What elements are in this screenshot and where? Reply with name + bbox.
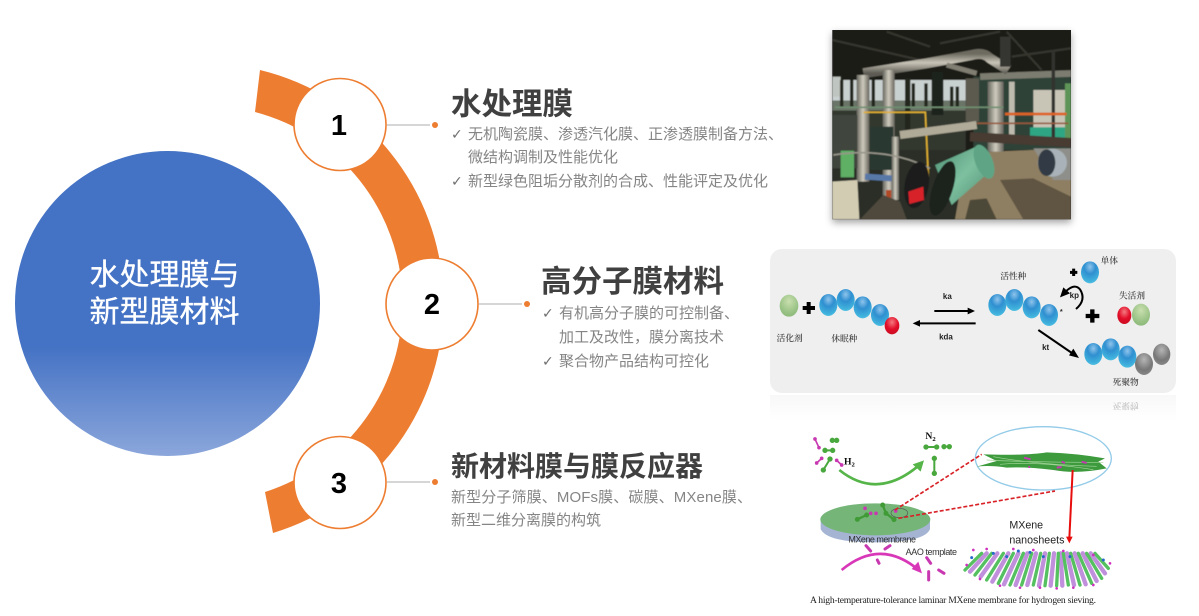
red arrow to nanosheets [1066, 470, 1073, 543]
activator ball [780, 295, 798, 317]
panel: polymerization reaction diagram: * [1060, 307, 1063, 316]
plus sign [1086, 309, 1099, 323]
kp curved arrow [1060, 287, 1083, 309]
text block 1: water treatment membranes: 微结构调制及性能优化 [468, 149, 618, 166]
active chain [988, 289, 1058, 326]
reflected label: 死聚物 [1113, 401, 1139, 412]
panel: polymerization reaction diagram: ka [943, 292, 952, 301]
membrane disk [820, 503, 930, 542]
text block 3: new material membranes: 新型分子筛膜、MOFs膜、碳膜、MXene膜、 [451, 489, 752, 506]
text block 2: polymer membrane materials: 加工及改性，膜分离技术 [559, 329, 724, 346]
diagram: MXene membrane for hydrogen sieving: nanosheets [1009, 534, 1064, 546]
panel: polymerization reaction diagram: 活性种 [1000, 270, 1027, 281]
diagram: MXene membrane for hydrogen sieving: AAO template [906, 547, 957, 557]
node 2 [386, 258, 530, 350]
photo: membrane plant equipment [832, 30, 1071, 219]
text block 1: water treatment membranes: ✓ [451, 174, 463, 190]
text block 1: water treatment membranes: 新型绿色阻垢分散剂的合成、性能评定及优化 [468, 173, 768, 190]
panel: polymerization reaction diagram: 失活剂 [1119, 289, 1145, 300]
magnified ellipse with MXene layers [975, 427, 1111, 490]
dormant chain [819, 289, 899, 334]
text block 1: water treatment membranes: 水处理膜 [451, 88, 573, 122]
text block 3: new material membranes: 新型二维分离膜的构筑 [451, 512, 601, 529]
text block 1: water treatment membranes: ✓ [451, 127, 463, 143]
figure caption: A high-temperature-tolerance laminar MXene membrane for hydrogen sieving. [810, 595, 1096, 606]
text block 2: polymer membrane materials: ✓ [542, 306, 554, 322]
green flow arrow [839, 460, 924, 484]
central circle: main topic [15, 151, 320, 456]
panel: polymerization reaction diagram [770, 249, 1176, 421]
text block 3: new material membranes [451, 451, 752, 529]
diagram: MXene membrane for hydrogen sieving: MXene membrane [848, 534, 916, 544]
text block 1: water treatment membranes: 无机陶瓷膜、渗透汽化膜、正渗透膜制备方法、 [468, 126, 783, 143]
central circle: main topic: 水处理膜与 [90, 259, 240, 292]
kt arrow [1038, 330, 1079, 358]
panel: polymerization reaction diagram: 死聚物 [1113, 376, 1139, 387]
node 1 [294, 78, 438, 170]
diagram: MXene membrane for hydrogen sieving: 2 [932, 436, 936, 443]
feed gas molecules [815, 439, 949, 473]
text block 2: polymer membrane materials: ✓ [542, 354, 554, 370]
dead chain [1084, 338, 1170, 375]
text block 2: polymer membrane materials: 有机高分子膜的可控制备、 [559, 305, 739, 322]
node 1: 1 [331, 110, 347, 142]
monomer [1070, 269, 1077, 276]
panel: polymerization reaction diagram: 单体 [1101, 254, 1118, 265]
diagram: MXene membrane for hydrogen sieving: MXene [1009, 520, 1043, 532]
diagram: MXene membrane for hydrogen sieving: 2 [852, 462, 856, 469]
text block 1: water treatment membranes [451, 88, 783, 190]
plus sign [803, 302, 815, 314]
node 3: 3 [331, 468, 347, 500]
text block 2: polymer membrane materials [541, 265, 739, 370]
text block 2: polymer membrane materials: 聚合物产品结构可控化 [559, 353, 709, 370]
permeate magenta arrow [842, 546, 944, 580]
panel: polymerization reaction diagram: kt [1042, 343, 1050, 352]
panel: polymerization reaction diagram: 活化剂 [777, 332, 803, 343]
diagram: MXene membrane for hydrogen sieving: N [925, 431, 932, 442]
text block 3: new material membranes: 新材料膜与膜反应器 [451, 451, 703, 482]
panel: polymerization reaction diagram: kda [939, 333, 953, 342]
panel: polymerization reaction diagram: kp [1070, 291, 1079, 300]
orange arc connector [255, 70, 444, 533]
diagram: MXene membrane for hydrogen sieving [815, 427, 1111, 588]
central circle: main topic: 新型膜材料 [90, 296, 240, 329]
dashed red zoom lines [895, 454, 1055, 518]
node 3 [294, 436, 438, 528]
nanosheet lattice [965, 549, 1110, 588]
panel: polymerization reaction diagram: 休眠种 [831, 333, 858, 344]
equilibrium arrows [913, 308, 976, 327]
node 2: 2 [424, 289, 440, 321]
deactivator balls [1117, 304, 1150, 326]
diagram: MXene membrane for hydrogen sieving: H [844, 457, 852, 468]
text block 2: polymer membrane materials: 高分子膜材料 [541, 265, 724, 299]
